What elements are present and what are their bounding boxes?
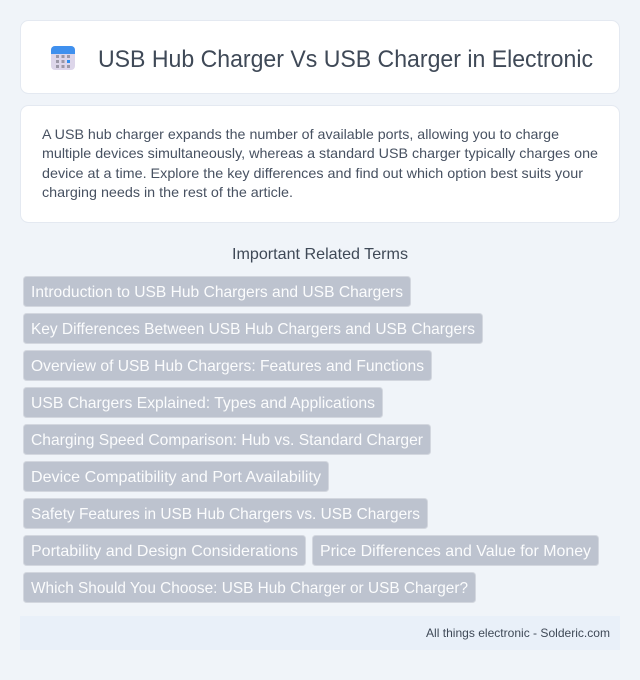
tag: usb chargers explained: USB Chargers Explained: Types and Applications xyxy=(31,395,375,412)
tag: safety: Safety Features in USB Hub Chargers vs. USB Chargers xyxy=(31,506,420,523)
panel: header xyxy=(20,20,620,94)
tag: safety xyxy=(24,498,428,528)
tag: portability xyxy=(24,536,306,566)
tag: compatibility: Device Compatibility and Port Availability xyxy=(31,469,321,486)
footer: All things electronic - Solderic.com xyxy=(426,626,610,640)
tag: overview xyxy=(24,350,432,380)
tag: which to choose xyxy=(24,572,476,602)
tag: introduction: Introduction to USB Hub Chargers and USB Chargers xyxy=(31,284,403,301)
panel: intro paragraph: A USB hub charger expands the number of available ports, allowing you to charge xyxy=(42,126,559,142)
tag: which to choose: Which Should You Choose: USB Hub Charger or USB Charger? xyxy=(31,580,468,597)
tag: charging speed xyxy=(24,424,430,454)
tag: overview: Overview of USB Hub Chargers: Features and Functions xyxy=(31,358,424,375)
tag: key differences: Key Differences Between USB Hub Chargers and USB Chargers xyxy=(31,321,475,338)
tag: price: Price Differences and Value for Money xyxy=(320,543,591,560)
tag: compatibility xyxy=(24,462,328,492)
icon: calendar xyxy=(51,46,75,70)
title: USB Hub Charger Vs USB Charger in Electronic xyxy=(98,46,593,73)
heading: related terms: Important Related Terms xyxy=(232,246,408,263)
footer xyxy=(20,616,620,650)
tag: introduction xyxy=(24,276,410,306)
tag: charging speed: Charging Speed Comparison: Hub vs. Standard Charger xyxy=(31,432,424,449)
tag: price xyxy=(312,536,598,566)
panel: intro paragraph: charging needs in the rest of the article. xyxy=(42,184,293,200)
tag: key differences xyxy=(24,314,482,344)
panel: intro paragraph: multiple devices simultaneously, whereas a standard USB charger typically charges one xyxy=(42,145,598,161)
tag: portability: Portability and Design Considerations xyxy=(31,543,298,560)
panel: intro paragraph xyxy=(20,106,620,222)
panel: intro paragraph: device at a time. Explore the key differences and find out which option best suits your xyxy=(42,165,583,181)
tag: usb chargers explained xyxy=(24,388,382,418)
